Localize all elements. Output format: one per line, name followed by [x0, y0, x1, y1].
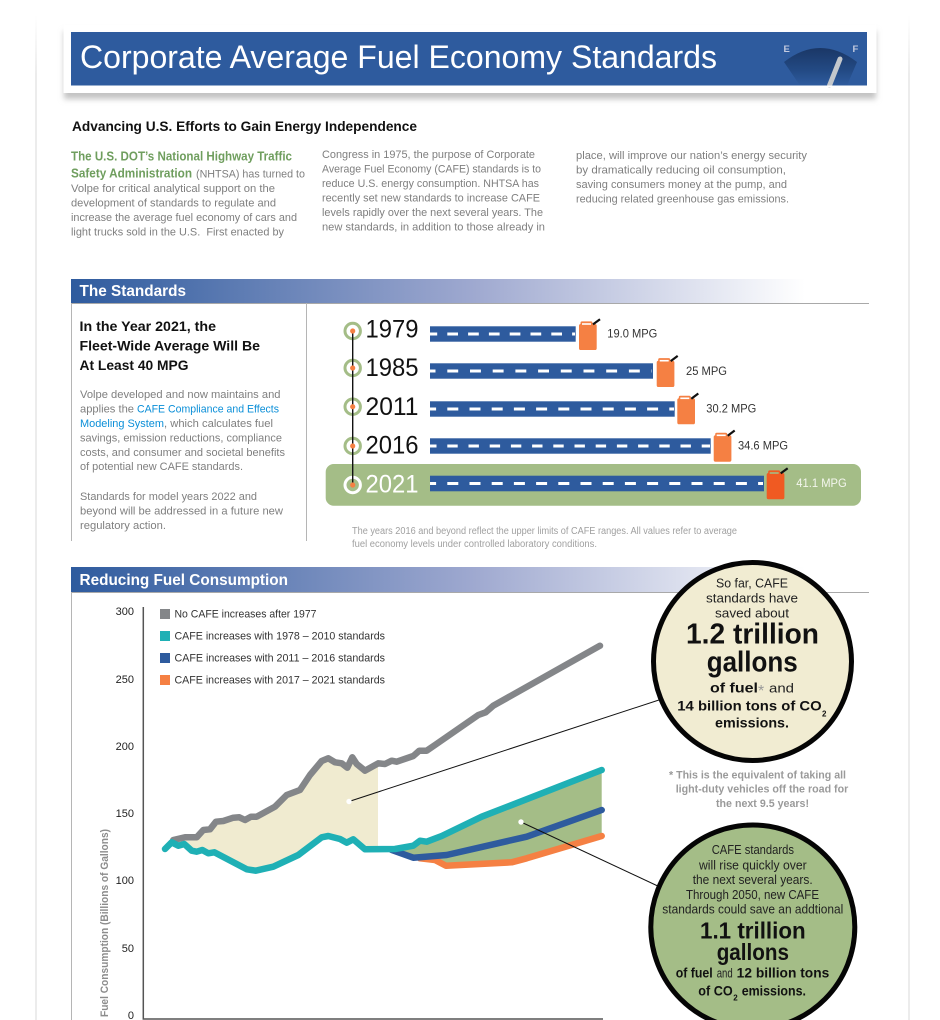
road bar: 2016	[430, 438, 711, 454]
fuel consumption line chart	[99, 606, 603, 1020]
intro text column 3	[576, 150, 807, 206]
callout: 1.1 trillion gallons future savings: 12 billion tons	[737, 966, 829, 981]
heading: 40 MPG fleet-wide average: Fleet-Wide Average Will Be	[80, 338, 260, 354]
callout: 1.2 trillion gallons saved: of fuel	[710, 681, 758, 696]
intro text column 1: The U.S. DOT’s National Highway Traffic	[71, 150, 292, 164]
section heading: Reducing Fuel Consumption: Reducing Fuel Consumption	[80, 572, 288, 589]
panel: MPG timeline chart	[326, 316, 861, 506]
heading: 40 MPG fleet-wide average	[80, 318, 260, 373]
callout: 1.2 trillion gallons saved: and	[769, 682, 794, 696]
callout: 1.1 trillion gallons future savings: standards could save an addtional	[662, 903, 843, 917]
MPG values: 41.1 MPG	[796, 478, 847, 490]
icon: fuel can 1985	[657, 356, 678, 387]
text block: CAFE model description: costs, and consumer and societal benefits	[80, 447, 285, 459]
axis tick labels: 300	[116, 606, 134, 618]
MPG values: 25 MPG	[686, 366, 727, 378]
intro text column 1: (NHTSA) has turned to	[196, 168, 305, 180]
callout: 1.2 trillion gallons saved: 1.2 trillion	[686, 618, 819, 650]
intro text column 2: Average Fuel Economy (CAFE) standards is to	[322, 164, 541, 176]
callout: 1.1 trillion gallons future savings: of CO	[698, 983, 733, 998]
footnote: standards chart: The years 2016 and beyond reflect the upper limits of CAFE ranges. All values refer to average	[352, 526, 738, 537]
MPG values	[607, 328, 847, 490]
axis tick labels: 100	[116, 875, 134, 887]
callout: 1.2 trillion gallons saved	[654, 562, 852, 760]
callout: 1.1 trillion gallons future savings: of fuel	[676, 966, 713, 981]
area: future fuel savings	[395, 770, 602, 866]
footnote: standards chart	[352, 526, 738, 550]
callout: 1.1 trillion gallons future savings: and	[717, 967, 733, 981]
callout: 1.1 trillion gallons future savings	[651, 825, 855, 1020]
footnote: equivalent vehicles off the road: light-duty vehicles off the road for	[676, 784, 849, 796]
year labels: 1985	[366, 354, 418, 382]
legend: CAFE increases with 2011 – 2016 standards	[174, 652, 385, 664]
text block: CAFE model description: of potential new CAFE standards.	[80, 461, 243, 473]
axis tick labels	[116, 606, 134, 1020]
icon: fuel gauge	[784, 44, 858, 88]
text block: future standards: beyond will be addressed in a future new	[80, 506, 284, 518]
road bar: 1979	[430, 326, 576, 342]
section heading: The Standards: The Standards	[80, 283, 186, 300]
text block: CAFE model description: Volpe developed and now maintains and	[80, 389, 280, 401]
intro text column 2	[322, 149, 545, 234]
callout: 1.2 trillion gallons saved: saved about	[715, 607, 790, 621]
intro text column 2: reduce U.S. energy consumption. NHTSA has	[322, 178, 539, 190]
MPG values: 30.2 MPG	[706, 403, 756, 415]
road bar: 2021	[430, 476, 764, 491]
text block: CAFE model description: applies the	[80, 404, 134, 416]
intro text column 3: place, will improve our nation’s energy security	[576, 150, 807, 162]
callout leader: future savings	[518, 819, 662, 888]
y-axis title: Fuel Consumption (Billions of Gallons)	[99, 829, 111, 1017]
intro text column 1: development of standards to regulate and	[71, 198, 276, 210]
intro text column 2: levels rapidly over the next several years. The	[322, 207, 543, 219]
line: 2017-2021 standards	[420, 836, 602, 866]
text block: CAFE model description: savings, emission reductions, compliance	[80, 432, 282, 444]
axes	[143, 607, 603, 1019]
text block: future standards	[80, 491, 284, 532]
intro text column 3: reducing related greenhouse gas emissions.	[576, 194, 789, 206]
icon: fuel can 2011	[677, 394, 698, 424]
intro text column 1: increase the average fuel economy of cars and	[71, 212, 297, 224]
intro text column 3: by dramatically reducing oil consumption,	[576, 164, 786, 176]
icon: fuel gauge: F	[852, 44, 858, 55]
intro text column 3: saving consumers money at the pump, and	[576, 179, 787, 191]
footnote: equivalent vehicles off the road	[669, 769, 849, 810]
line: 2011-2016 standards	[392, 810, 602, 858]
callout: 1.2 trillion gallons saved: emissions.	[715, 716, 789, 731]
callout: 1.2 trillion gallons saved: 2	[822, 710, 827, 719]
section heading: Reducing Fuel Consumption	[71, 567, 869, 593]
intro text column 1: Volpe for critical analytical support on the	[71, 183, 275, 195]
year labels: 1979	[366, 316, 418, 344]
section heading: The Standards	[71, 279, 869, 304]
icon: fuel gauge: E	[784, 44, 790, 55]
callout: 1.1 trillion gallons future savings: emissions.	[742, 983, 806, 998]
footnote: standards chart: fuel economy levels under controlled laboratory conditions.	[352, 539, 597, 550]
intro text column 2: new standards, in addition to those already in	[322, 222, 545, 234]
area: fuel saved so far	[172, 757, 378, 871]
axis tick labels: 50	[122, 943, 134, 955]
road bar: 1985	[430, 363, 653, 379]
legend	[160, 608, 385, 686]
legend: No CAFE increases after 1977	[174, 608, 316, 620]
2021 highlight band	[326, 464, 861, 506]
callout: 1.2 trillion gallons saved: So far, CAFE	[716, 577, 788, 591]
intro text column 1: Safety Administration	[71, 166, 192, 180]
callout: 1.1 trillion gallons future savings: will rise quickly over	[698, 858, 807, 872]
legend: CAFE increases with 2017 – 2021 standards	[174, 674, 385, 686]
intro text column 2: recently set new standards to increase CAFE	[322, 192, 540, 204]
intro text column 2: Congress in 1975, the purpose of Corporate	[322, 149, 535, 161]
line: 1978-2010 standards	[165, 770, 602, 871]
axis tick labels: 250	[116, 674, 134, 686]
year labels	[366, 316, 418, 499]
callout leader: savings so far	[346, 699, 662, 804]
text block: CAFE model description: , which calculates fuel	[164, 418, 273, 430]
callout: 1.1 trillion gallons future savings: 2	[733, 994, 738, 1003]
road bar: 2011	[430, 401, 675, 417]
text block: future standards: Standards for model years 2022 and	[80, 491, 257, 503]
timeline markers	[345, 323, 360, 493]
text block: CAFE model description: Modeling System	[80, 418, 164, 430]
intro text column 1	[71, 150, 305, 238]
panel: standards description	[80, 318, 285, 532]
header banner	[64, 25, 876, 99]
footnote: equivalent vehicles off the road: the next 9.5 years!	[716, 798, 809, 810]
heading: 40 MPG fleet-wide average: In the Year 2021, the	[80, 318, 216, 334]
text block: CAFE model description: CAFE Compliance and Effects	[137, 404, 279, 416]
callout: 1.2 trillion gallons saved: gallons	[707, 646, 798, 678]
callout: 1.1 trillion gallons future savings: CAFE standards	[712, 843, 794, 857]
footnote: equivalent vehicles off the road: * This is the equivalent of taking all	[669, 769, 846, 781]
text block: CAFE model description	[80, 389, 285, 473]
title: Corporate Average Fuel Economy Standards	[80, 39, 717, 75]
intro text column 1: light trucks sold in the U.S. First enacted by	[71, 226, 284, 238]
icon: fuel can 2021	[767, 468, 788, 499]
year labels: 2011	[366, 393, 418, 421]
heading: 40 MPG fleet-wide average: At Least 40 MPG	[80, 357, 189, 373]
callout: 1.1 trillion gallons future savings: gallons	[717, 939, 789, 965]
callout: 1.1 trillion gallons future savings: the next several years.	[693, 873, 813, 887]
callout: 1.1 trillion gallons future savings: Through 2050, new CAFE	[686, 888, 819, 902]
callout: 1.2 trillion gallons saved: *	[758, 683, 764, 700]
legend: CAFE increases with 1978 – 2010 standards	[174, 630, 385, 642]
axis tick labels: 200	[116, 741, 134, 753]
year labels: 2016	[366, 432, 418, 460]
text block: future standards: regulatory action.	[80, 520, 166, 532]
MPG values: 34.6 MPG	[738, 440, 788, 452]
icon: fuel can 2016	[714, 430, 735, 462]
callout: 1.1 trillion gallons future savings: 1.1 trillion	[700, 917, 806, 943]
subtitle: Advancing U.S. Efforts to Gain Energy Independence	[72, 118, 417, 134]
callout: 1.2 trillion gallons saved: 14 billion tons of CO	[677, 699, 822, 714]
axis tick labels: 150	[116, 808, 134, 820]
line: no CAFE increases	[173, 646, 600, 840]
year labels: 2021	[366, 471, 418, 499]
MPG values: 19.0 MPG	[607, 328, 657, 340]
callout: 1.2 trillion gallons saved: standards have	[706, 592, 798, 606]
icon: fuel can 1979	[579, 319, 600, 350]
